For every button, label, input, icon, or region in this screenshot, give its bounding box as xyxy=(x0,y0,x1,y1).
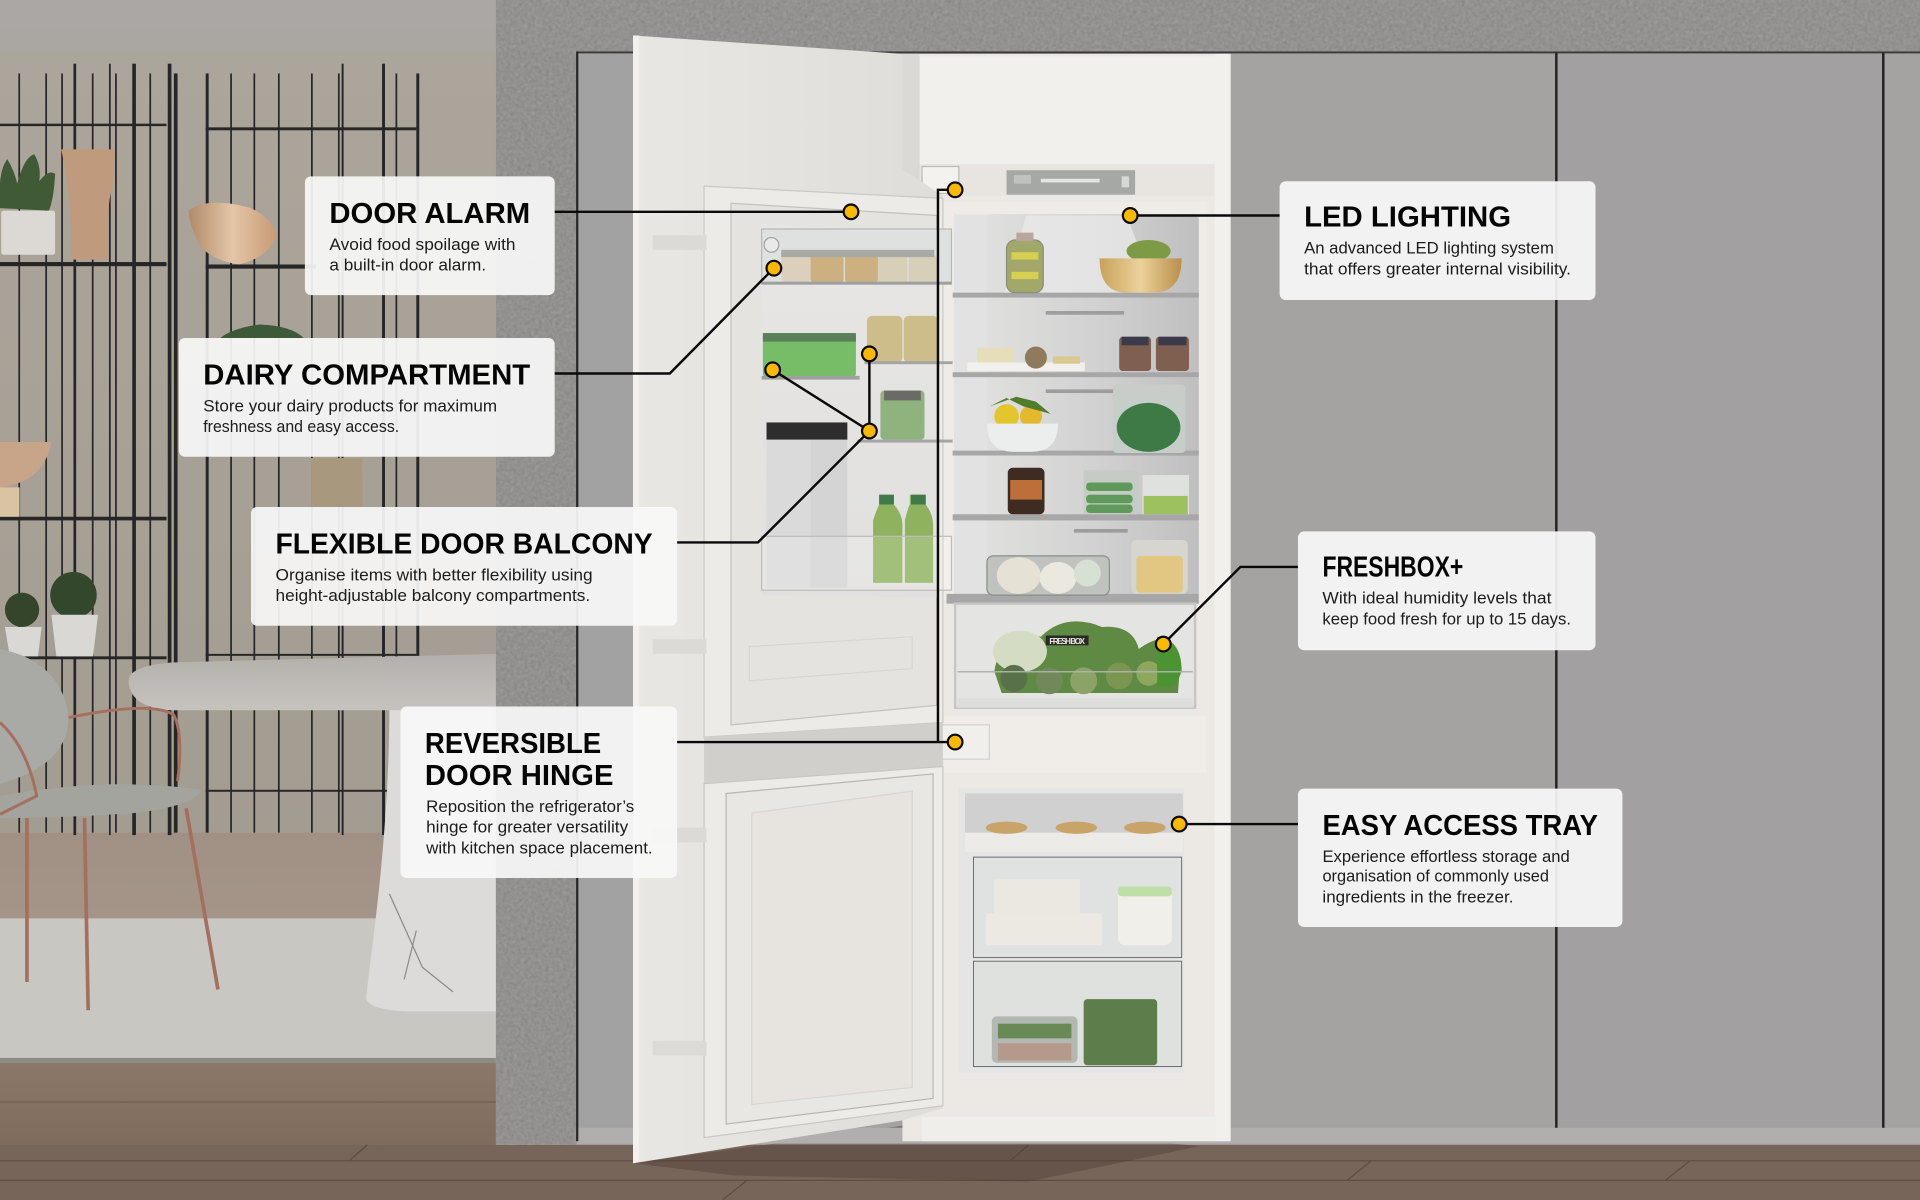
food: eggs box xyxy=(987,556,1109,595)
freezer drawer upper xyxy=(973,857,1182,958)
text: freshbox description: keep food fresh for up to 15 days. xyxy=(1322,609,1571,628)
callout: door alarm xyxy=(305,176,555,295)
food: chocolate desserts xyxy=(1119,337,1189,371)
lower door liner xyxy=(704,767,943,1138)
text: balcony description: height-adjustable balcony compartments. xyxy=(276,586,590,605)
callout: LED lighting xyxy=(1280,181,1596,300)
plant in speckled pot xyxy=(0,154,55,255)
text: freshbox description xyxy=(1322,589,1571,628)
door handles xyxy=(653,235,707,1056)
hinge middle xyxy=(902,725,989,769)
text: door alarm description: Avoid food spoilage with xyxy=(329,235,516,254)
hanging plant xyxy=(220,324,304,338)
text: tray description: organisation of commonly used xyxy=(1322,867,1549,886)
text: tray description: Experience effortless storage and xyxy=(1322,847,1570,866)
control panel xyxy=(1007,170,1135,195)
leader: door alarm xyxy=(555,211,851,213)
door green bottles xyxy=(873,495,933,583)
heading: easy access tray: EASY ACCESS TRAY xyxy=(1322,810,1598,842)
callout: dairy compartment xyxy=(179,338,555,457)
heading: dairy compartment: DAIRY COMPARTMENT xyxy=(203,359,531,391)
text: hinge description: Reposition the refrigerator’s xyxy=(426,797,634,816)
leader: easy access tray xyxy=(1179,823,1298,825)
text: LED description xyxy=(1304,238,1571,278)
heading: flexible door balcony: FLEXIBLE DOOR BALCONY xyxy=(276,528,653,560)
peach vase xyxy=(61,149,115,260)
concrete pillar and top band xyxy=(496,0,1920,1145)
text: balcony description xyxy=(276,565,593,605)
text: tray description xyxy=(1322,847,1570,906)
text: hinge description: hinge for greater versatility xyxy=(426,818,629,837)
leader: reversible hinge xyxy=(677,190,955,742)
background: room floor xyxy=(0,833,496,1149)
chair xyxy=(0,649,218,1010)
left bowl on stand xyxy=(0,442,51,517)
text: LED description: An advanced LED lighting system xyxy=(1304,238,1554,257)
leader: freshbox xyxy=(1163,567,1298,644)
callout: flexible door balcony xyxy=(251,507,677,626)
brass vase behind card xyxy=(311,458,362,507)
upper door liner xyxy=(704,186,943,737)
door lower bin xyxy=(762,536,951,590)
callout: reversible door hinge xyxy=(400,707,677,878)
text: dairy description: freshness and easy access. xyxy=(203,417,399,436)
door dairy balcony xyxy=(762,229,951,285)
round table xyxy=(129,654,496,1011)
food: pickle jar xyxy=(1007,233,1043,293)
text: tray description: ingredients in the freezer. xyxy=(1322,887,1513,906)
fridge compartment xyxy=(944,202,1207,600)
open door outer edge xyxy=(633,36,943,1163)
freezer drawer lower xyxy=(973,961,1182,1067)
food: gold bowl with grapes xyxy=(1100,240,1182,293)
callout: easy access tray xyxy=(1298,789,1622,927)
door jars xyxy=(762,316,953,443)
shelves xyxy=(947,293,1199,604)
food: peas box xyxy=(1142,475,1189,514)
leader: flexible balcony xyxy=(677,354,869,542)
text: door alarm description: a built-in door alarm. xyxy=(329,256,486,275)
text: hinge description: with kitchen space placement. xyxy=(425,838,653,857)
callout: freshbox+ xyxy=(1298,531,1596,650)
text: LED description: that offers greater internal visibility. xyxy=(1304,259,1571,278)
text: dairy description xyxy=(203,396,497,436)
freshbox drawer xyxy=(955,604,1195,708)
fridge cabinet body xyxy=(902,54,1231,1141)
heading: LED lighting: LED LIGHTING xyxy=(1304,202,1511,234)
door tall bottles xyxy=(767,422,847,588)
food: cheese plate xyxy=(967,347,1085,371)
leader: dairy compartment xyxy=(555,268,774,373)
door outer highlight xyxy=(633,36,639,1163)
heading: reversible door hinge xyxy=(425,728,613,792)
leader: LED lighting xyxy=(1130,215,1280,217)
text: door alarm description xyxy=(329,235,516,275)
heading: freshbox+: FRESHBOX+ xyxy=(1322,552,1463,584)
food: lemons in bowl xyxy=(987,397,1058,452)
freshbox drawer: FRESH BOX xyxy=(1049,637,1086,646)
text: balcony description: Organise items with better flexibility using xyxy=(276,565,593,584)
food: sauce jar xyxy=(1008,468,1044,514)
text: freshbox description: With ideal humidity levels that xyxy=(1322,589,1552,608)
text: hinge description xyxy=(425,797,653,857)
tilted bowl xyxy=(189,203,277,264)
shelving unit xyxy=(0,64,419,835)
two potted plants xyxy=(5,572,98,656)
divider xyxy=(944,716,1206,773)
text: dairy description: Store your dairy products for maximum xyxy=(203,396,497,415)
gap between doors xyxy=(704,722,943,784)
marker dots xyxy=(765,182,1187,831)
food: spinach bag xyxy=(1113,384,1185,453)
grey cabinets xyxy=(576,51,1920,1144)
freezer compartment xyxy=(959,789,1184,1073)
food: cucumber box xyxy=(1084,470,1138,514)
food: pasta bag xyxy=(1131,540,1188,594)
background: foreground wood floor xyxy=(0,1122,1920,1200)
background: room wall xyxy=(0,0,496,845)
heading: reversible door hinge: REVERSIBLE xyxy=(425,728,601,760)
hinge upper xyxy=(922,167,959,193)
heading: reversible door hinge: DOOR HINGE xyxy=(425,760,613,792)
heading: door alarm: DOOR ALARM xyxy=(329,198,530,230)
